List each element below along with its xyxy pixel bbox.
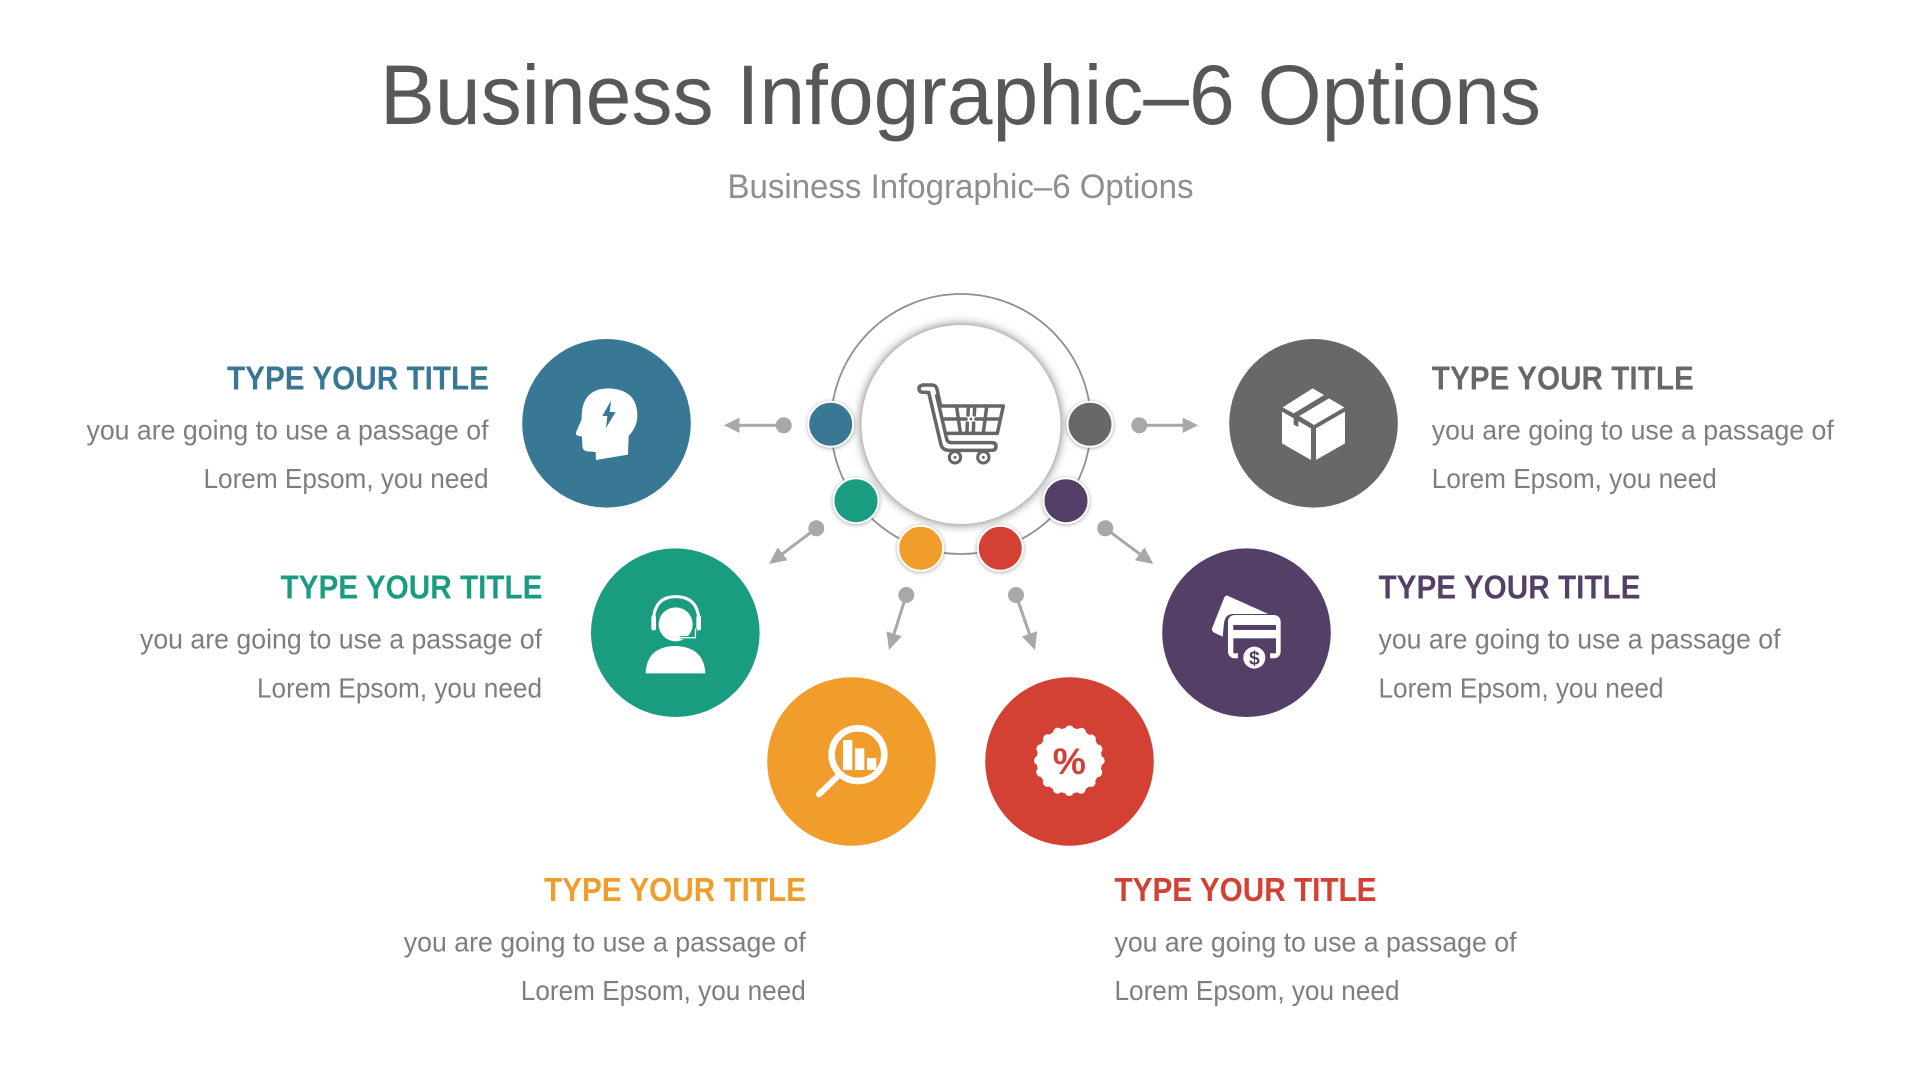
text block: orange <box>404 872 806 1006</box>
node: red <box>977 526 1023 572</box>
text block: green: Lorem Epsom, you need <box>257 672 542 703</box>
node: blue <box>808 402 854 448</box>
text block: purple <box>1378 570 1781 703</box>
text block: gray: you are going to use a passage of <box>1432 414 1834 445</box>
text block: orange: TYPE YOUR TITLE <box>544 872 806 909</box>
text block: green <box>140 570 542 703</box>
text block: red: you are going to use a passage of <box>1114 926 1517 957</box>
outer ring <box>831 294 1091 554</box>
text block: purple: you are going to use a passage of <box>1378 624 1781 655</box>
option circle: green headset <box>591 548 760 717</box>
arrow: to orange <box>886 587 914 650</box>
icon: magnifier chart <box>819 728 884 794</box>
arrow: to blue <box>724 417 792 433</box>
text block: green: you are going to use a passage of <box>140 624 542 655</box>
icon: percent badge <box>1037 728 1102 793</box>
text block: gray: Lorem Epsom, you need <box>1432 463 1717 494</box>
node: gray <box>1067 402 1113 448</box>
hub disc <box>862 325 1060 524</box>
text block: red: TYPE YOUR TITLE <box>1114 872 1376 909</box>
text block: purple: TYPE YOUR TITLE <box>1378 570 1640 607</box>
text block: green: TYPE YOUR TITLE <box>280 570 542 607</box>
text block: blue: Lorem Epsom, you need <box>204 463 488 494</box>
title: Business Infographic–6 Options <box>380 48 1541 142</box>
icon: package box <box>1282 388 1345 460</box>
node: green <box>833 478 879 524</box>
option circle: blue head <box>522 339 691 508</box>
option circle: orange magnifier <box>767 677 936 846</box>
text block: orange: you are going to use a passage of <box>404 926 806 957</box>
text block: blue: you are going to use a passage of <box>86 414 489 445</box>
icon: head with lightning <box>576 388 637 460</box>
icon: credit cards and coin <box>1212 596 1281 671</box>
icon: credit cards and coin: $ <box>1249 649 1260 670</box>
subtitle: Business Infographic–6 Options <box>728 168 1194 206</box>
text block: blue <box>86 360 489 494</box>
text block: red: Lorem Epsom, you need <box>1114 975 1400 1006</box>
central hub <box>831 294 1091 554</box>
text block: orange: Lorem Epsom, you need <box>521 975 806 1006</box>
arrow: to red <box>1008 587 1037 650</box>
arrow: to green <box>769 520 824 564</box>
option circle: red percent <box>985 677 1154 846</box>
hub shadow <box>861 324 1061 524</box>
text block: blue: TYPE YOUR TITLE <box>227 360 489 397</box>
node: orange <box>898 526 944 572</box>
text block: gray <box>1432 360 1834 494</box>
text block: purple: Lorem Epsom, you need <box>1378 672 1664 703</box>
option circle: purple card <box>1162 548 1331 717</box>
option circle: gray box <box>1229 339 1398 508</box>
text block: red <box>1114 872 1517 1006</box>
icon: headset agent <box>646 597 705 673</box>
icon: shopping cart <box>919 385 1003 463</box>
arrow: to gray <box>1131 417 1198 433</box>
arrow: to purple <box>1097 520 1153 564</box>
icon: percent badge: % <box>1053 740 1086 782</box>
node: purple <box>1043 478 1089 524</box>
text block: gray: TYPE YOUR TITLE <box>1432 360 1694 397</box>
